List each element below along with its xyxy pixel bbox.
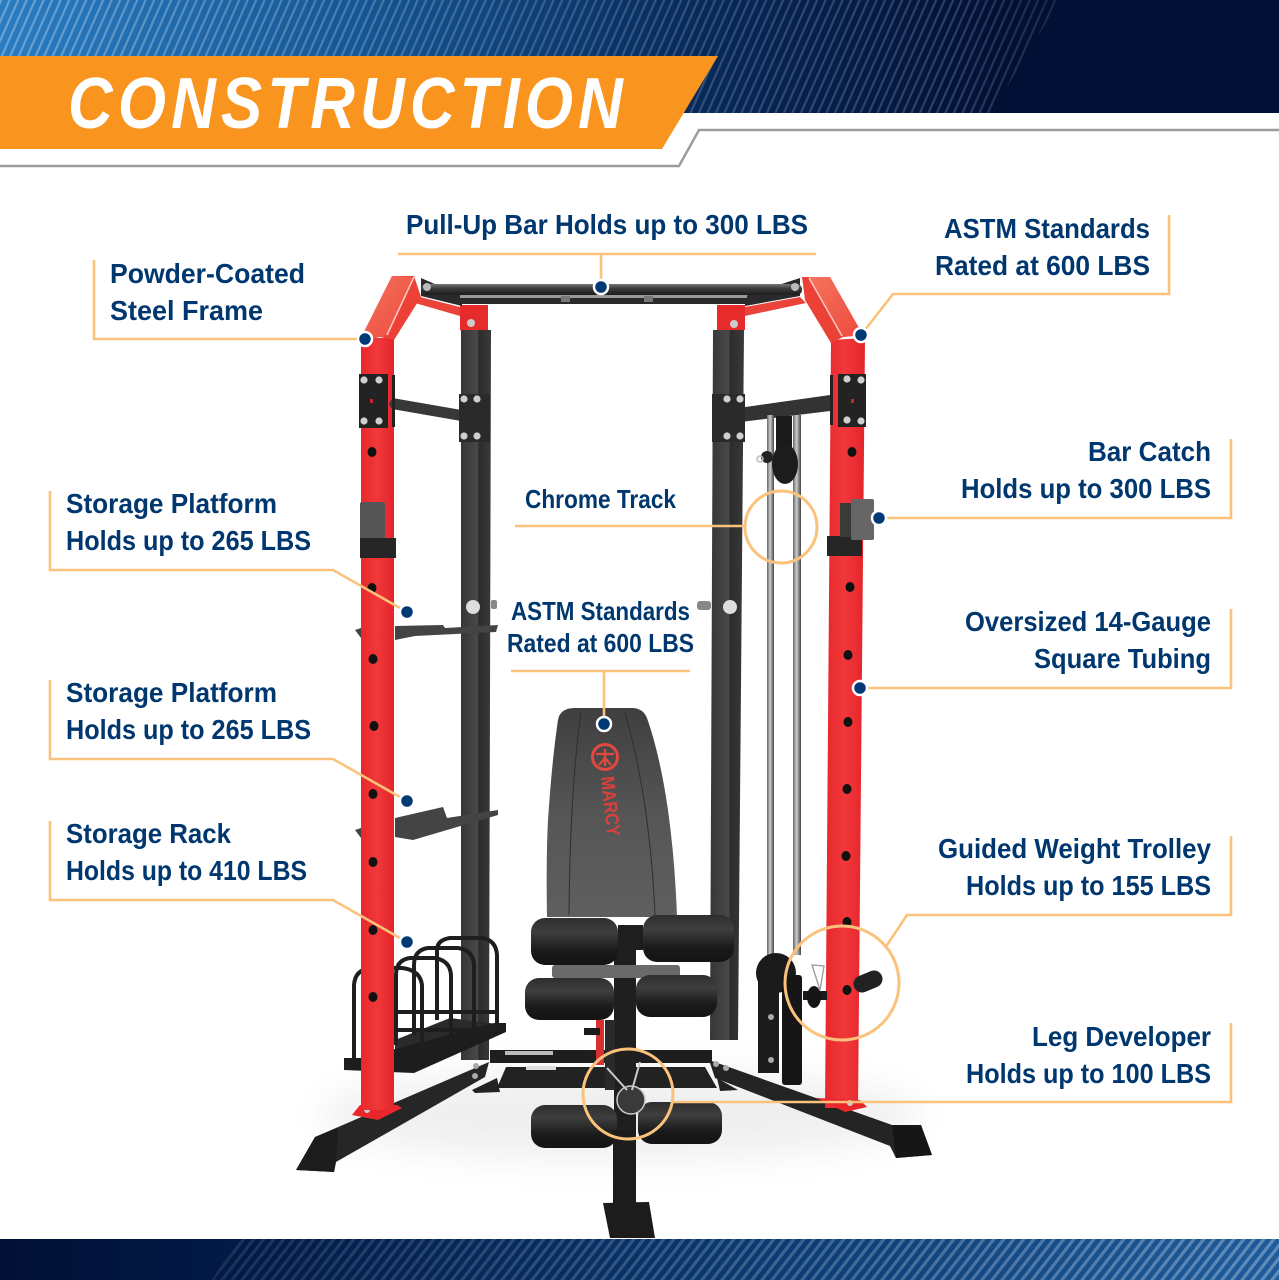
power rack product illustration — [296, 276, 932, 1238]
marcy logo — [592, 744, 618, 770]
left angled arm — [361, 276, 421, 340]
callout: powder-coated frame: Powder-Coated — [110, 258, 305, 289]
callout: bench ASTM: ASTM Standards — [511, 596, 690, 626]
orange title band — [0, 56, 718, 149]
callout: ASTM rack — [854, 213, 1169, 342]
floor shadow — [320, 1070, 920, 1160]
pull-up bar — [415, 278, 806, 316]
callout: storage platform lower — [50, 677, 414, 808]
callout: bench ASTM — [507, 596, 694, 731]
callout: bar catch: Holds up to 300 LBS — [961, 473, 1211, 504]
marcy wordmark: MARCY — [596, 775, 623, 837]
callout: powder-coated frame — [94, 258, 372, 346]
storage platforms — [355, 600, 737, 840]
bench back pad — [547, 708, 677, 917]
weight trolley — [756, 953, 874, 1085]
callout: storage rack — [50, 818, 414, 949]
callout: storage rack: Holds up to 410 LBS — [66, 855, 307, 886]
callout: storage platform upper: Storage Platform — [66, 488, 277, 519]
right angled arm — [802, 277, 863, 343]
callout: weight trolley: Holds up to 155 LBS — [966, 870, 1211, 901]
upright holes — [368, 447, 856, 995]
callout: weight trolley — [785, 833, 1231, 1040]
footer band — [0, 1239, 1279, 1280]
bolt plates — [359, 374, 866, 442]
callout: storage platform lower: Holds up to 265 LBS — [66, 714, 311, 745]
rack base — [296, 1050, 932, 1172]
bar catches — [360, 499, 874, 558]
callout: leg developer: Leg Developer — [1032, 1021, 1211, 1052]
callout: leg developer: Holds up to 100 LBS — [966, 1058, 1211, 1089]
callout: weight trolley: Guided Weight Trolley — [938, 833, 1211, 864]
cross arms — [395, 395, 830, 424]
dark rear posts — [461, 330, 744, 1060]
header grey rule — [0, 130, 1279, 166]
callout: leg developer — [583, 1021, 1231, 1139]
callout: ASTM rack: Rated at 600 LBS — [935, 250, 1150, 281]
right red upright — [802, 277, 865, 1108]
callout: pull-up bar — [398, 209, 816, 294]
plate storage rack — [344, 938, 506, 1073]
callout: pull-up bar: Pull-Up Bar Holds up to 300 LBS — [406, 209, 808, 240]
title: CONSTRUCTION — [68, 64, 628, 144]
logo figure — [596, 749, 614, 766]
callout: bar catch: Bar Catch — [1088, 436, 1211, 467]
callout: storage platform lower: Storage Platform — [66, 677, 277, 708]
callout: square tubing — [853, 606, 1231, 695]
callout: chrome track — [515, 484, 817, 563]
callout: square tubing: Square Tubing — [1034, 643, 1211, 674]
left upright front segment over rack — [361, 945, 394, 1110]
callout: ASTM rack: ASTM Standards — [944, 213, 1150, 244]
callout: storage rack: Storage Rack — [66, 818, 231, 849]
chrome track and pulley — [757, 415, 801, 955]
rack hole — [368, 992, 378, 1002]
red floor plates — [352, 1098, 867, 1120]
callout: storage platform upper — [50, 488, 414, 619]
callout: bar catch — [872, 436, 1231, 525]
bench rollers and spine — [525, 915, 734, 1238]
callout: powder-coated frame: Steel Frame — [110, 295, 263, 326]
left red upright — [361, 276, 421, 1110]
header banner — [0, 0, 1279, 166]
callout: storage platform upper: Holds up to 265 LBS — [66, 525, 311, 556]
callout: bench ASTM: Rated at 600 LBS — [507, 628, 694, 658]
red top brackets — [460, 305, 745, 330]
callout: square tubing: Oversized 14-Gauge — [965, 606, 1211, 637]
callout: chrome track: Chrome Track — [525, 484, 676, 514]
